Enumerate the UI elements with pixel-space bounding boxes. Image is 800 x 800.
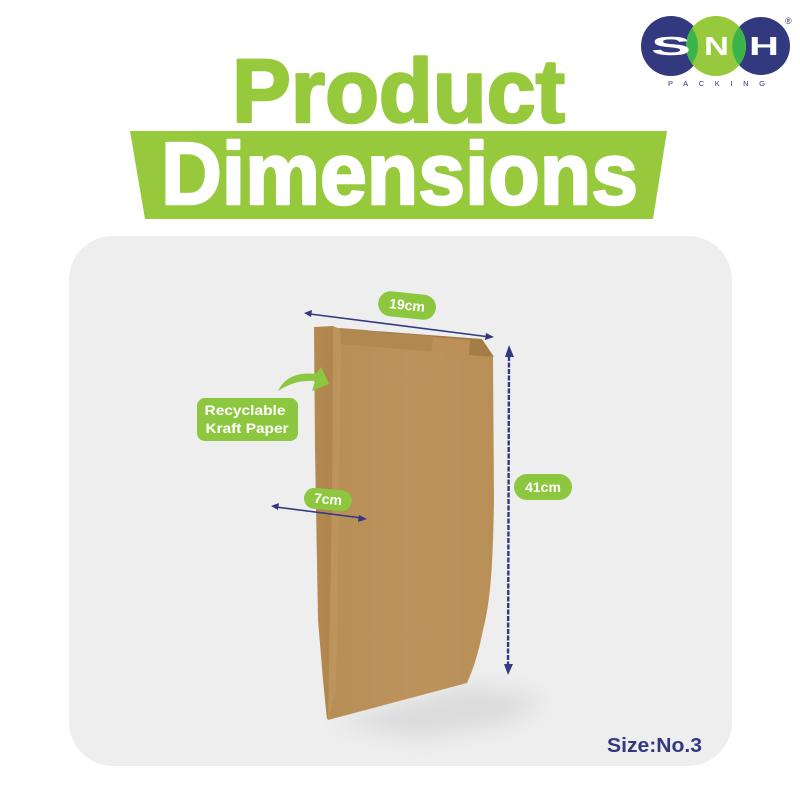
dimension arrow: width 19cm	[304, 310, 494, 340]
logo: SNH Packing: S	[651, 31, 691, 61]
callout: recyclable kraft paper: Kraft Paper	[206, 420, 289, 436]
title banner: Dimensions: Dimensions	[161, 124, 638, 223]
size label: Size:No.3	[607, 735, 702, 757]
callout: recyclable kraft paper	[197, 398, 298, 441]
label: 41cm	[514, 474, 572, 500]
bag shadow	[332, 686, 545, 738]
dimension arrow: depth 7cm	[271, 503, 367, 522]
logo: SNH Packing: N	[704, 31, 729, 61]
bag fold	[328, 326, 341, 720]
title: Product: Product	[232, 42, 565, 142]
label: 19cm	[377, 290, 437, 321]
logo: SNH Packing: H	[749, 31, 779, 61]
bag inner back panel	[336, 328, 494, 357]
bag front	[328, 344, 494, 720]
label: 19cm: 19cm	[388, 295, 426, 315]
callout: recyclable kraft paper: Recyclable	[204, 402, 286, 418]
logo: SNH Packing: PACKING	[668, 79, 765, 88]
dimension arrow: height 41cm	[504, 345, 514, 675]
logo: SNH Packing: ®	[785, 16, 792, 26]
label: 7cm: 7cm	[313, 490, 343, 508]
icon: curved green arrow	[278, 367, 329, 391]
panel: product background	[69, 236, 732, 766]
label: 41cm: 41cm	[525, 479, 561, 495]
product: kraft paper bag	[314, 326, 494, 720]
bag side gusset	[314, 326, 336, 720]
label: 7cm	[303, 487, 353, 512]
logo: SNH Packing	[641, 16, 792, 88]
